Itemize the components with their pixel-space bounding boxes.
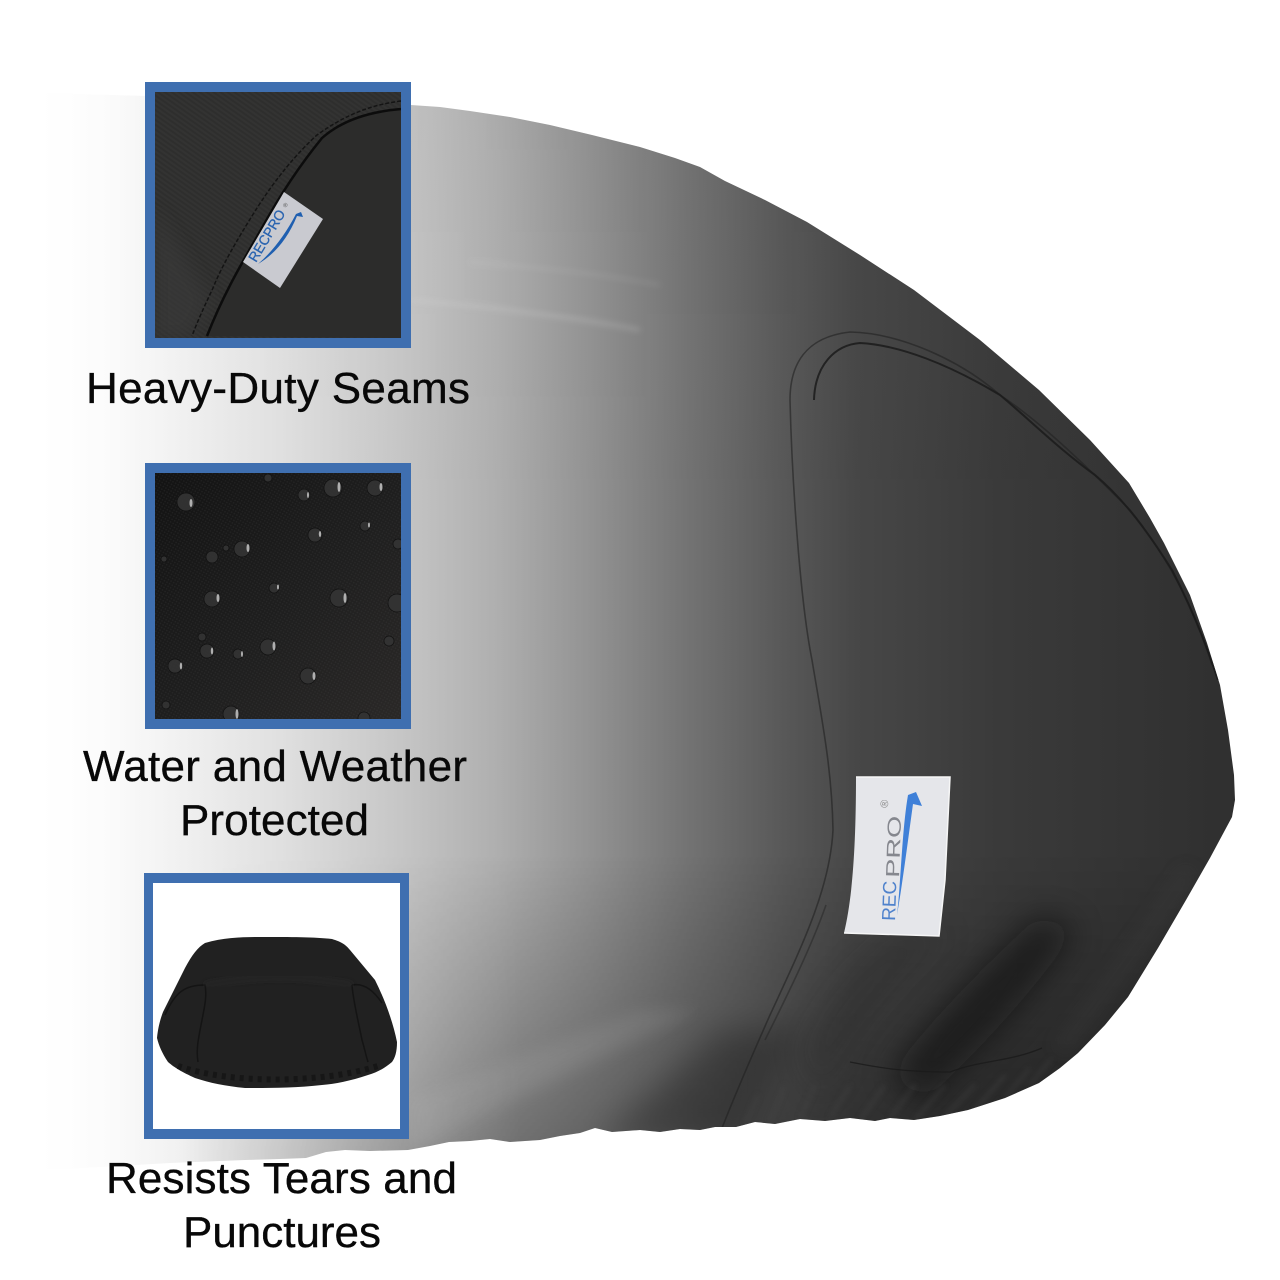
- caption: heavy-duty seams: Heavy-Duty Seams: [86, 364, 470, 413]
- caption: resists tears and punctures: [106, 1154, 457, 1257]
- seam tag: ®: [282, 201, 290, 209]
- water droplets: [161, 474, 406, 724]
- caption: water and weather protected: Water and Weather: [83, 742, 467, 791]
- care label: large RecPro tag: PRO: [883, 815, 906, 878]
- caption: resists tears and punctures: Punctures: [183, 1208, 381, 1257]
- mini cover product: [157, 937, 397, 1088]
- panel: tears and punctures: [144, 873, 409, 1139]
- panel: water and weather: [145, 463, 411, 729]
- lower folds: [892, 913, 1072, 1100]
- care label: large RecPro tag: ®: [879, 800, 891, 808]
- caption: water and weather protected: [83, 742, 467, 845]
- seam tag: RECPRO: [245, 207, 288, 265]
- care label: large RecPro tag: REC: [879, 880, 901, 921]
- panel: heavy-duty seams: [145, 82, 411, 348]
- caption: resists tears and punctures: Resists Tears and: [106, 1154, 457, 1203]
- cover body with fade: [138, 96, 1235, 1164]
- seams: [722, 332, 1218, 1128]
- care label: large RecPro tag: [844, 777, 950, 936]
- seam tag: [243, 192, 323, 288]
- caption: water and weather protected: Protected: [180, 796, 369, 845]
